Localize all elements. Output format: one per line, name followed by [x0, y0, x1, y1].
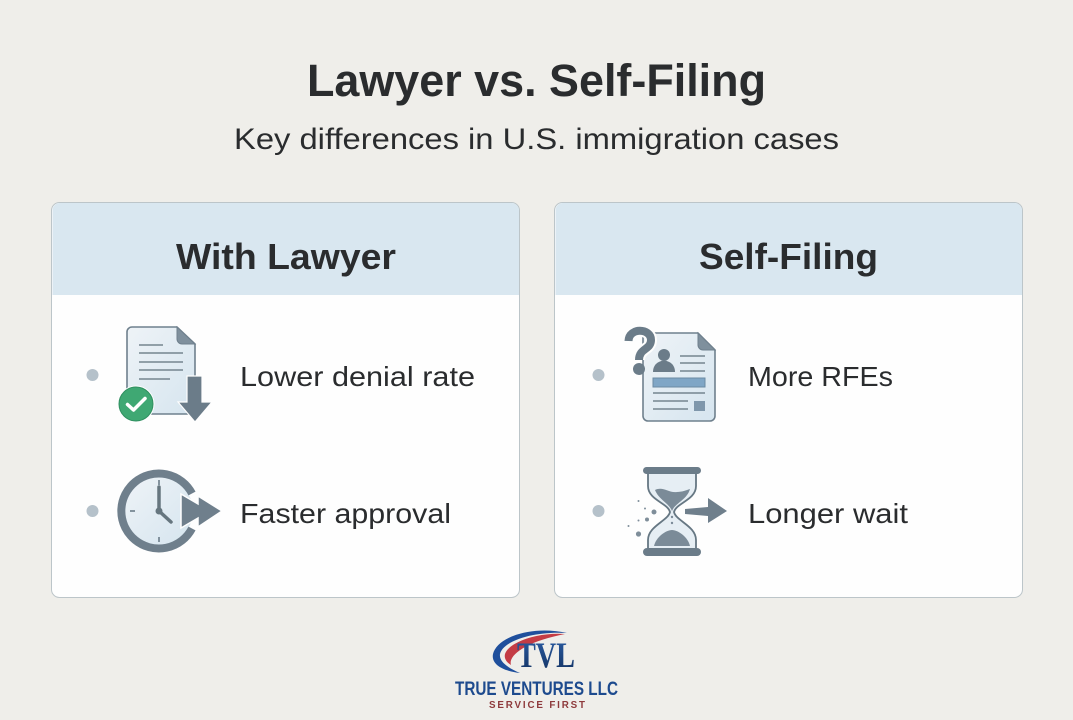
bullet	[592, 369, 604, 381]
bullet	[86, 369, 98, 381]
company name: TRUE VENTURES LLC	[455, 678, 618, 700]
subtitle: Key differences in U.S. immigration cases	[234, 123, 839, 156]
logo swoosh	[493, 630, 567, 673]
icon: clock with fast-forward arrow	[121, 474, 222, 549]
heading: with lawyer: With Lawyer	[176, 236, 396, 277]
panel header: with lawyer	[52, 203, 519, 295]
icon: document with question mark	[628, 331, 715, 421]
text: more RFEs: More RFEs	[748, 361, 893, 392]
heading: self-filing: Self-Filing	[699, 236, 878, 277]
text: faster approval: Faster approval	[240, 498, 451, 529]
bullet	[592, 505, 604, 517]
text: longer wait: Longer wait	[748, 498, 908, 529]
panel header: self-filing	[556, 203, 1022, 295]
icon: approved document with down arrow	[118, 327, 212, 422]
panel: with lawyer	[52, 202, 520, 598]
logo: True Ventures LLC	[455, 630, 618, 711]
logo letters: TVL	[517, 635, 575, 675]
bullet	[86, 505, 98, 517]
tagline: SERVICE FIRST	[489, 700, 585, 711]
icon: hourglass with arrow	[628, 467, 727, 556]
title: Lawyer vs. Self-Filing	[307, 55, 766, 106]
panel: self-filing	[554, 202, 1022, 598]
text: lower denial rate: Lower denial rate	[240, 361, 475, 392]
